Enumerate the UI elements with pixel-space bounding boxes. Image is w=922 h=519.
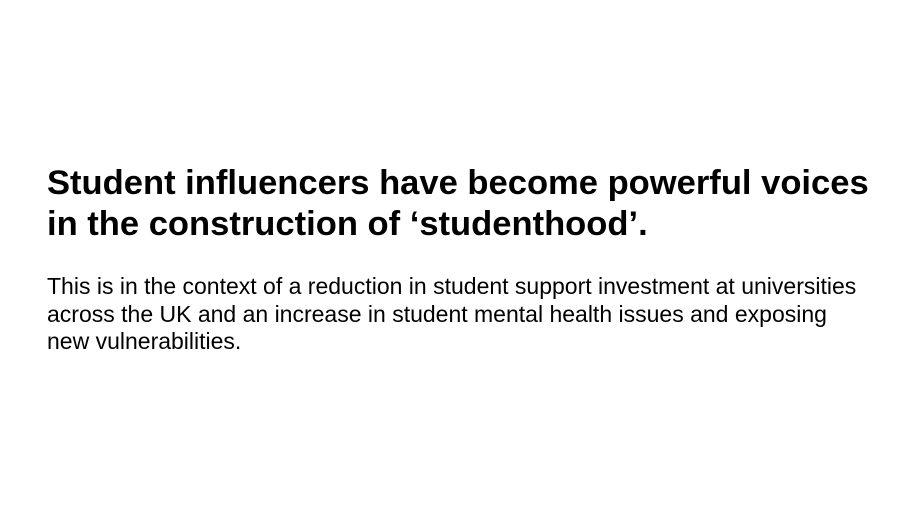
heading: Student influencers have become powerful voices bbox=[47, 164, 869, 202]
heading bbox=[47, 164, 869, 243]
body text: new vulnerabilities. bbox=[47, 328, 241, 354]
body text: across the UK and an increase in student mental health issues and exposing bbox=[47, 300, 827, 326]
heading: in the construction of ‘studenthood’. bbox=[47, 205, 648, 243]
body text: This is in the context of a reduction in student support investment at universities bbox=[47, 273, 856, 299]
body text bbox=[47, 273, 856, 354]
